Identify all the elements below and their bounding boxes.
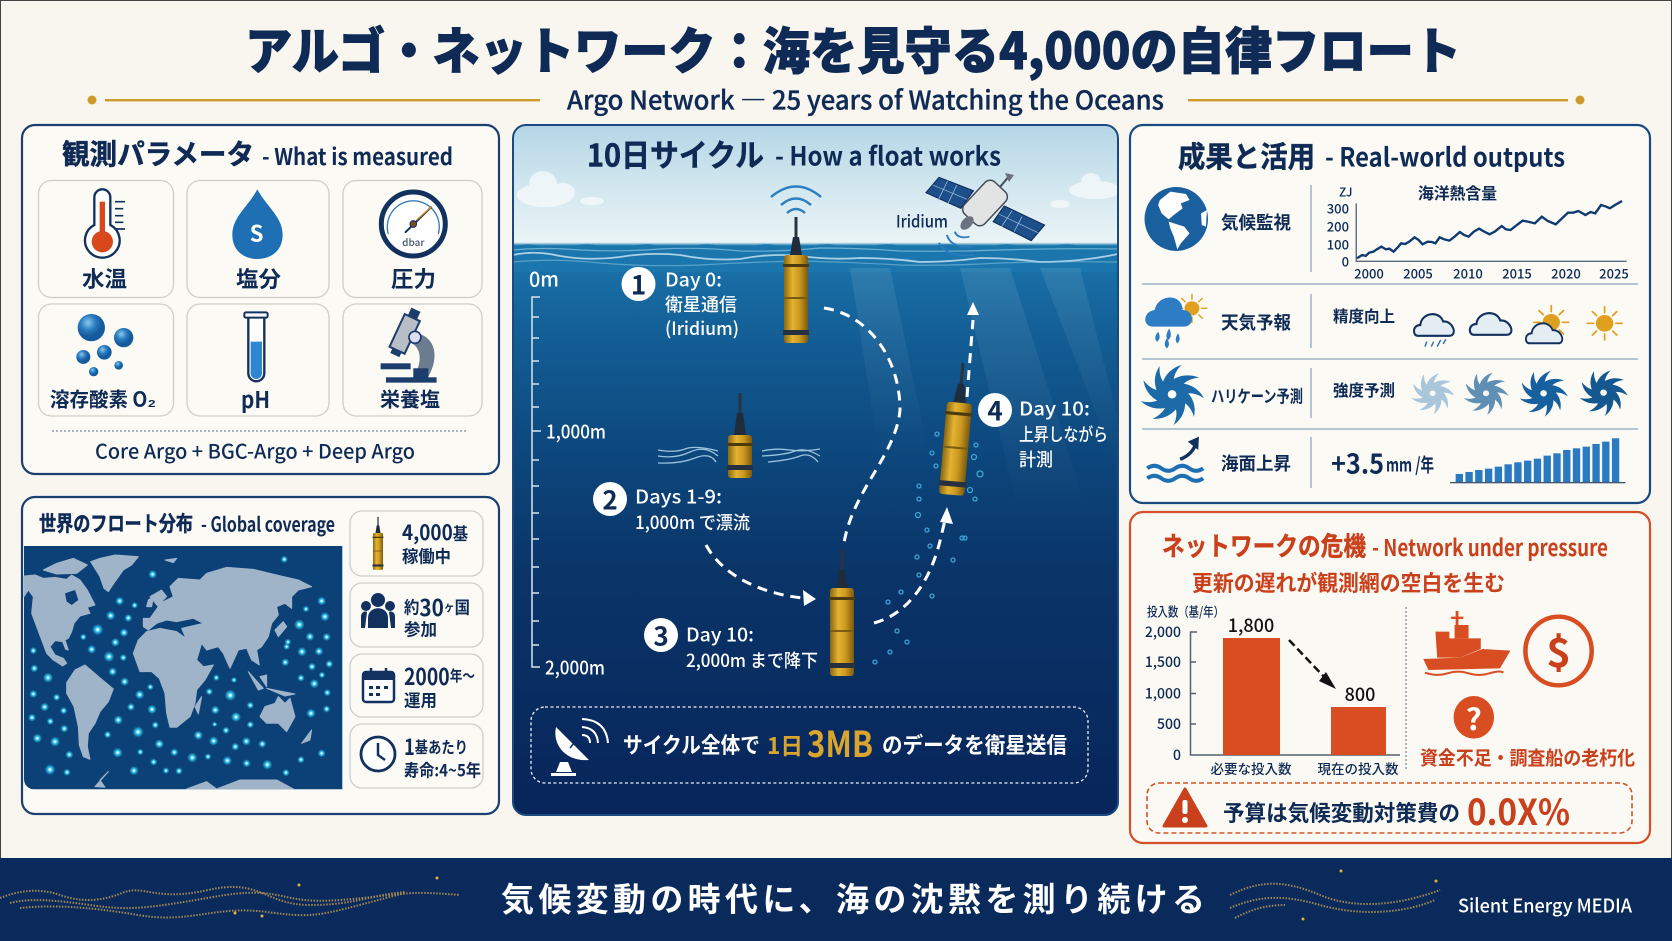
stat: lifespan <box>404 730 481 782</box>
icon: question <box>1454 695 1494 739</box>
icon: salinity drop <box>232 189 283 259</box>
step 3: Day 10: <box>686 620 754 648</box>
heading: pressure: - Network under pressure <box>1372 529 1608 563</box>
icon: thermometer <box>85 189 125 258</box>
row labels: 精度向上 <box>1333 303 1395 327</box>
footer band <box>0 858 1672 941</box>
step 1: (Iridium) <box>665 315 739 341</box>
depth scale: 1,000m <box>546 418 606 444</box>
row labels: ハリケーン予測 <box>1211 382 1303 408</box>
bar chart: deployments: 現在の投入数 <box>1318 758 1399 778</box>
stat: 4000 floats: 稼働中 <box>402 542 451 568</box>
panel: network under pressure <box>1130 512 1650 843</box>
stat: lifespan: 寿命:4~5年 <box>404 756 481 782</box>
heading: pressure: ネットワークの危機 <box>1162 526 1366 564</box>
heading: how a float works <box>587 130 1001 176</box>
callout text: のデータを衛星送信 <box>882 728 1067 760</box>
icon: hurricane <box>1140 363 1206 426</box>
step 1: 衛星通信 <box>665 291 737 317</box>
bar chart: deployments: 0 <box>1173 745 1181 765</box>
row labels: +3.5 <box>1331 442 1384 482</box>
row 1 chart <box>1356 201 1627 261</box>
row labels: mm /年 <box>1386 450 1434 478</box>
stat: 30 countries: 参加 <box>404 616 437 640</box>
bar chart: deployments: 必要な投入数 <box>1210 758 1292 778</box>
stat: 4000 floats <box>402 517 468 568</box>
bar chart: deployments: 500 <box>1157 714 1181 734</box>
icon: satellite dish <box>551 719 608 776</box>
chart labels <box>1327 180 1629 282</box>
stat: since 2000: 2000年〜 <box>404 658 475 692</box>
step 4: Day 10: <box>1019 394 1090 422</box>
stat: 30 countries: 約30ヶ国 <box>404 589 470 623</box>
step 1: 1 <box>631 266 646 302</box>
icon: pressure gauge <box>381 192 445 256</box>
bar chart: deployments <box>1145 602 1400 778</box>
chart labels: 200 <box>1327 216 1349 236</box>
callout text: 3MB <box>807 716 873 768</box>
step 1: Day 0: <box>665 266 722 292</box>
icon: test tube <box>244 312 268 381</box>
row icons and graphics <box>1140 187 1629 483</box>
chart labels: 2015 <box>1502 264 1532 282</box>
dashed arrow: descend to 2000m <box>706 545 816 606</box>
subtitle with gold rules <box>88 80 1584 118</box>
heading: parameters: - What is measured <box>262 138 453 172</box>
heading: outputs <box>1178 134 1565 176</box>
bar chart: deployments: 1,000 <box>1145 684 1181 704</box>
chart labels: 2020 <box>1551 264 1581 282</box>
float 4 rising <box>938 362 977 496</box>
title: アルゴ・ネットワーク：海を見守る4,000の自律フロート <box>245 12 1461 84</box>
chart labels: ZJ <box>1339 184 1352 200</box>
stat: since 2000: 運用 <box>404 686 437 712</box>
water surface <box>514 244 1117 266</box>
bar chart: deployments: 1,800 <box>1228 612 1274 638</box>
heading: outputs: - Real-world outputs <box>1325 138 1565 174</box>
chart labels: 2000 <box>1354 264 1384 282</box>
icon: globe <box>1145 187 1208 251</box>
icon: dollar: $ <box>1546 621 1571 679</box>
arrow head to surface <box>967 302 979 315</box>
step 2: 1,000m で漂流 <box>635 509 750 535</box>
weather sequence <box>1414 306 1622 347</box>
parameter labels: 圧力 <box>391 262 436 294</box>
icon: pressure gauge: dbar <box>402 234 425 249</box>
row labels <box>1211 209 1434 482</box>
sea level bars <box>1450 438 1626 483</box>
callout text: 1日 <box>767 727 803 761</box>
dashed arrow: rise to surface <box>967 320 973 397</box>
float 2 drifting <box>727 393 753 478</box>
panel: real-world outputs <box>1130 125 1650 503</box>
heading: parameters <box>62 133 453 173</box>
icon: satellite <box>926 173 1045 256</box>
panel: 10 day cycle <box>513 125 1121 815</box>
satellite label: Iridium <box>896 208 948 232</box>
step 3 <box>644 616 818 673</box>
heading: outputs: 成果と活用 <box>1178 134 1315 176</box>
clouds <box>517 171 1121 208</box>
step 3: 3 <box>653 616 669 654</box>
bar chart: deployments: 2,000 <box>1145 622 1181 642</box>
icon: salinity drop: S <box>250 217 264 249</box>
row labels: 天気予報 <box>1221 309 1291 335</box>
hurricane intensity sequence <box>1411 369 1629 418</box>
icon: ship <box>1423 611 1510 675</box>
step 4: 計測 <box>1019 446 1053 472</box>
dashed arrow: descend to park <box>824 308 900 543</box>
step 1 <box>622 266 739 341</box>
footer brand: Silent Energy MEDIA <box>1458 892 1632 918</box>
heading: global coverage <box>39 508 335 538</box>
stat cards <box>350 511 483 788</box>
step 2 <box>593 480 750 535</box>
row labels: 海面上昇 <box>1221 450 1291 476</box>
icon: microscope <box>381 306 437 383</box>
step 3: 2,000m まで降下 <box>686 647 818 673</box>
icon: signal waves <box>771 186 821 213</box>
chart labels: 2025 <box>1599 264 1629 282</box>
panel: global coverage <box>22 497 499 814</box>
stat: lifespan: 1基あたり <box>404 730 468 762</box>
bubbles near rising float <box>873 432 983 664</box>
row labels: 気候監視 <box>1221 209 1291 235</box>
stat: since 2000 <box>404 658 475 712</box>
step 4: 上昇しながら <box>1019 421 1108 447</box>
depth scale: 2,000m <box>545 654 605 680</box>
heading: pressure <box>1162 526 1608 564</box>
bar chart: deployments: 800 <box>1345 681 1375 707</box>
step 4: 4 <box>987 392 1003 428</box>
stat: 4000 floats: 4,000基 <box>402 517 468 547</box>
subheading: 更新の遅れが観測網の空白を生む <box>1192 566 1505 598</box>
icon: people <box>361 593 395 628</box>
parameter labels: 溶存酸素 O₂ <box>50 384 156 412</box>
parameter labels <box>50 262 440 415</box>
chart labels: 300 <box>1327 198 1349 218</box>
heading: parameters: 観測パラメータ <box>62 133 254 173</box>
callout text: サイクル全体で <box>623 728 760 760</box>
chart labels: 海洋熱含量 <box>1418 180 1497 204</box>
dashed arrow: ascend <box>874 507 953 623</box>
icon: sea level rise <box>1147 437 1203 481</box>
depth scale: 0m <box>529 264 559 292</box>
float 1 at surface <box>783 217 809 343</box>
step 2: 2 <box>602 480 618 518</box>
parameter labels: 塩分 <box>236 262 281 294</box>
alert box: 予算は気候変動対策費の <box>1223 796 1460 828</box>
panel: what is measured <box>22 125 499 474</box>
parameter labels: pH <box>241 381 270 415</box>
icon: rain and sun <box>1145 294 1207 348</box>
callout text <box>623 716 1067 768</box>
chart labels: 0 <box>1342 252 1349 270</box>
icon: calendar <box>363 668 394 702</box>
parameter labels: 栄養塩 <box>380 384 440 412</box>
heading: global coverage: - Global coverage <box>201 508 335 538</box>
heading: how a float works: - How a float works <box>775 136 1001 174</box>
heading: how a float works: 10日サイクル <box>587 130 764 176</box>
parameter cards <box>38 180 482 416</box>
step 4 <box>978 392 1108 472</box>
icon: dollar <box>1525 617 1592 685</box>
current lines <box>658 447 820 463</box>
stat: 30 countries <box>404 589 470 640</box>
float 3 at depth <box>829 550 855 676</box>
depth scale <box>529 264 606 680</box>
callout: daily data <box>531 707 1088 783</box>
icon: float <box>373 517 383 570</box>
icon: warning triangle <box>1164 789 1206 826</box>
heading: global coverage: 世界のフロート分布 <box>39 508 193 538</box>
argo types text: Core Argo + BGC-Argo + Deep Argo <box>95 436 415 464</box>
parameter labels: 水温 <box>82 262 127 294</box>
alert box <box>1147 783 1632 836</box>
row labels: 強度予測 <box>1333 377 1395 401</box>
footer waves <box>0 884 1440 918</box>
step 2: Days 1-9: <box>635 482 722 510</box>
chart labels: 2005 <box>1403 264 1433 282</box>
bar chart: deployments: 1,500 <box>1145 652 1181 672</box>
chart labels: 100 <box>1327 234 1349 254</box>
subtitle with gold rules: Argo Network — 25 years of Watching the Oceans <box>567 80 1164 118</box>
icon: question: ? <box>1466 695 1482 739</box>
causes text: 資金不足・調査船の老朽化 <box>1420 744 1635 770</box>
footer sparkles <box>234 870 1438 920</box>
icons: ship, dollar, question <box>1423 611 1592 739</box>
footer slogan: 気候変動の時代に、海の沈黙を測り続ける <box>501 873 1205 921</box>
alert box: 0.0X% <box>1467 784 1570 836</box>
world map <box>24 546 342 789</box>
chart labels: 2010 <box>1453 264 1483 282</box>
icon: oxygen bubbles <box>76 314 133 376</box>
bar chart: deployments: 投入数（基/年） <box>1147 602 1224 620</box>
icon: clock <box>361 737 395 771</box>
icons in parameters <box>76 189 445 383</box>
